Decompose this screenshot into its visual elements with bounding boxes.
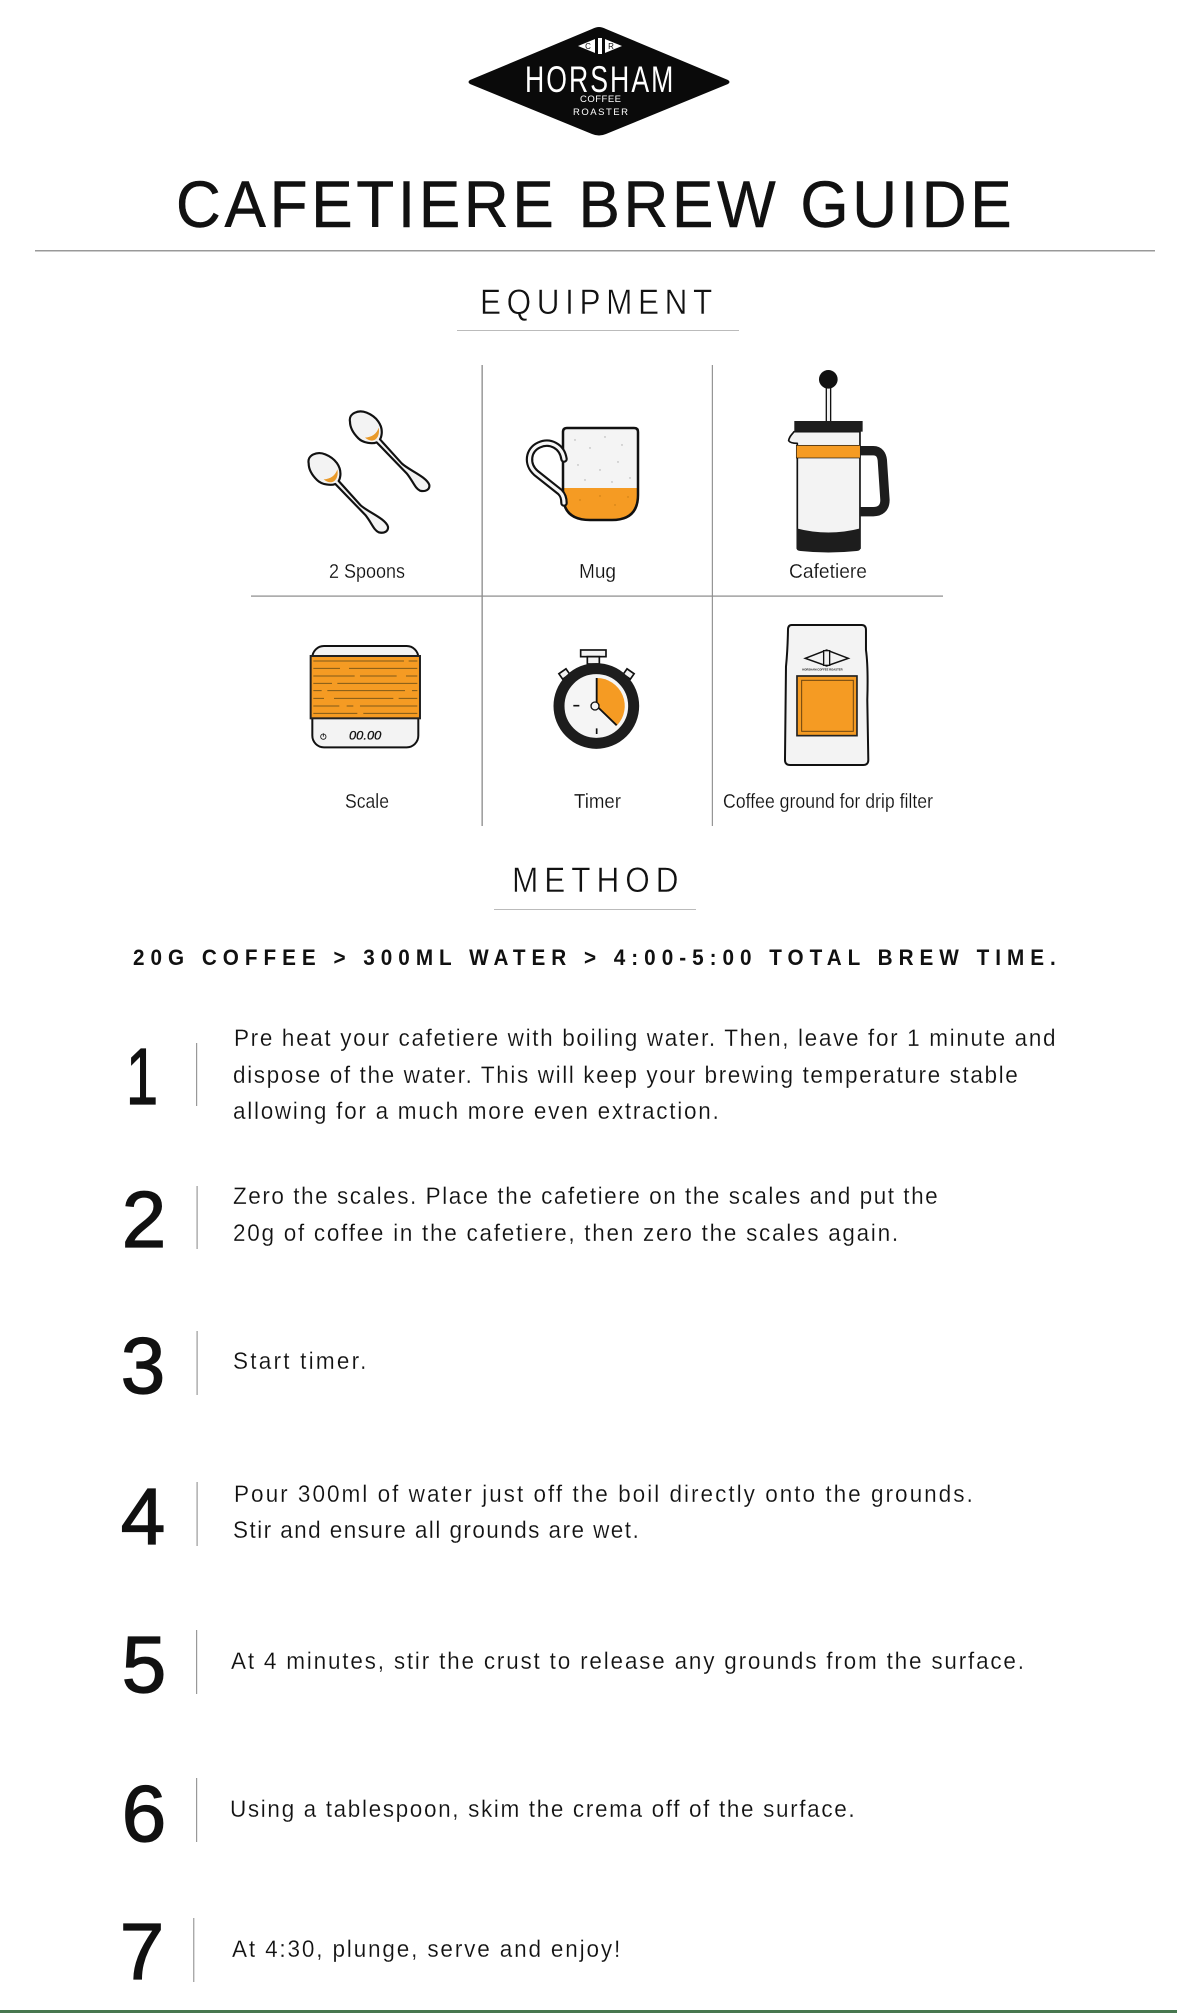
- step 2: [122, 1175, 938, 1264]
- step 1: Pre heat your cafetiere with boiling water. Then, leave for 1 minute and: [234, 1024, 1056, 1051]
- logo: Horsham Coffee Roaster: HORSHAM: [525, 59, 673, 100]
- icon: coffee bag: HORSHAM COFFEE ROASTER: [802, 668, 843, 672]
- footer bar: [0, 2010, 1177, 2013]
- icon: scale: 00.00: [349, 729, 382, 743]
- label: timer: Timer: [574, 791, 621, 813]
- step 3: Start timer.: [233, 1347, 366, 1374]
- step 1: allowing for a much more even extraction.: [233, 1097, 719, 1124]
- step 2: 2: [122, 1175, 166, 1264]
- step 4: [121, 1472, 973, 1561]
- logo: Horsham Coffee Roaster: COFFEE: [580, 94, 621, 105]
- step 5: 5: [122, 1620, 166, 1709]
- step 5: At 4 minutes, stir the crust to release any grounds from the surface.: [231, 1647, 1024, 1674]
- icon: timer: [559, 650, 634, 743]
- step 7: 7: [120, 1907, 164, 1996]
- step 6: [122, 1769, 855, 1858]
- step 7: At 4:30, plunge, serve and enjoy!: [232, 1935, 620, 1962]
- icon: scale: [311, 646, 420, 747]
- logo: Horsham Coffee Roaster: ROASTER: [573, 107, 628, 118]
- step 2: 20g of coffee in the cafetiere, then zero the scales again.: [233, 1219, 898, 1246]
- icon: cafetiere: [789, 370, 885, 552]
- step 4: Stir and ensure all grounds are wet.: [233, 1516, 639, 1543]
- logo: Horsham Coffee Roaster: [468, 27, 730, 136]
- equipment grid: [251, 365, 943, 826]
- step 3: [121, 1321, 366, 1410]
- step 1: [126, 1024, 1056, 1124]
- heading: method: METHOD: [512, 862, 679, 900]
- step 3: 3: [121, 1321, 165, 1410]
- logo: Horsham Coffee Roaster: C: [585, 42, 591, 51]
- icon: coffee bag: [785, 625, 868, 765]
- heading: equipment: EQUIPMENT: [480, 284, 712, 322]
- icon: mug: [530, 428, 638, 520]
- label: mug: Mug: [579, 561, 616, 583]
- step 4: 4: [121, 1472, 165, 1561]
- step 6: Using a tablespoon, skim the crema off of the surface.: [230, 1795, 855, 1822]
- label: scale: Scale: [345, 791, 389, 813]
- step 1: dispose of the water. This will keep your brewing temperature stable: [233, 1061, 1018, 1088]
- logo: Horsham Coffee Roaster: R: [608, 42, 614, 51]
- label: 2 spoons: 2 Spoons: [329, 561, 405, 583]
- step 7: [120, 1907, 620, 1996]
- step 1: 1: [126, 1032, 158, 1121]
- label: cafetiere: Cafetiere: [789, 561, 867, 583]
- icon: two spoons: [308, 411, 429, 533]
- ratio summary: 20G COFFEE > 300ML WATER > 4:00-5:00 TOTAL BREW TIME.: [133, 944, 1056, 970]
- step 5: [122, 1620, 1024, 1709]
- step 6: 6: [122, 1769, 166, 1858]
- label: coffee ground for drip filter: Coffee ground for drip filter: [723, 791, 933, 813]
- step 2: Zero the scales. Place the cafetiere on the scales and put the: [233, 1182, 938, 1209]
- title: CAFETIERE BREW GUIDE: [176, 167, 1012, 241]
- step 4: Pour 300ml of water just off the boil directly onto the grounds.: [234, 1480, 973, 1507]
